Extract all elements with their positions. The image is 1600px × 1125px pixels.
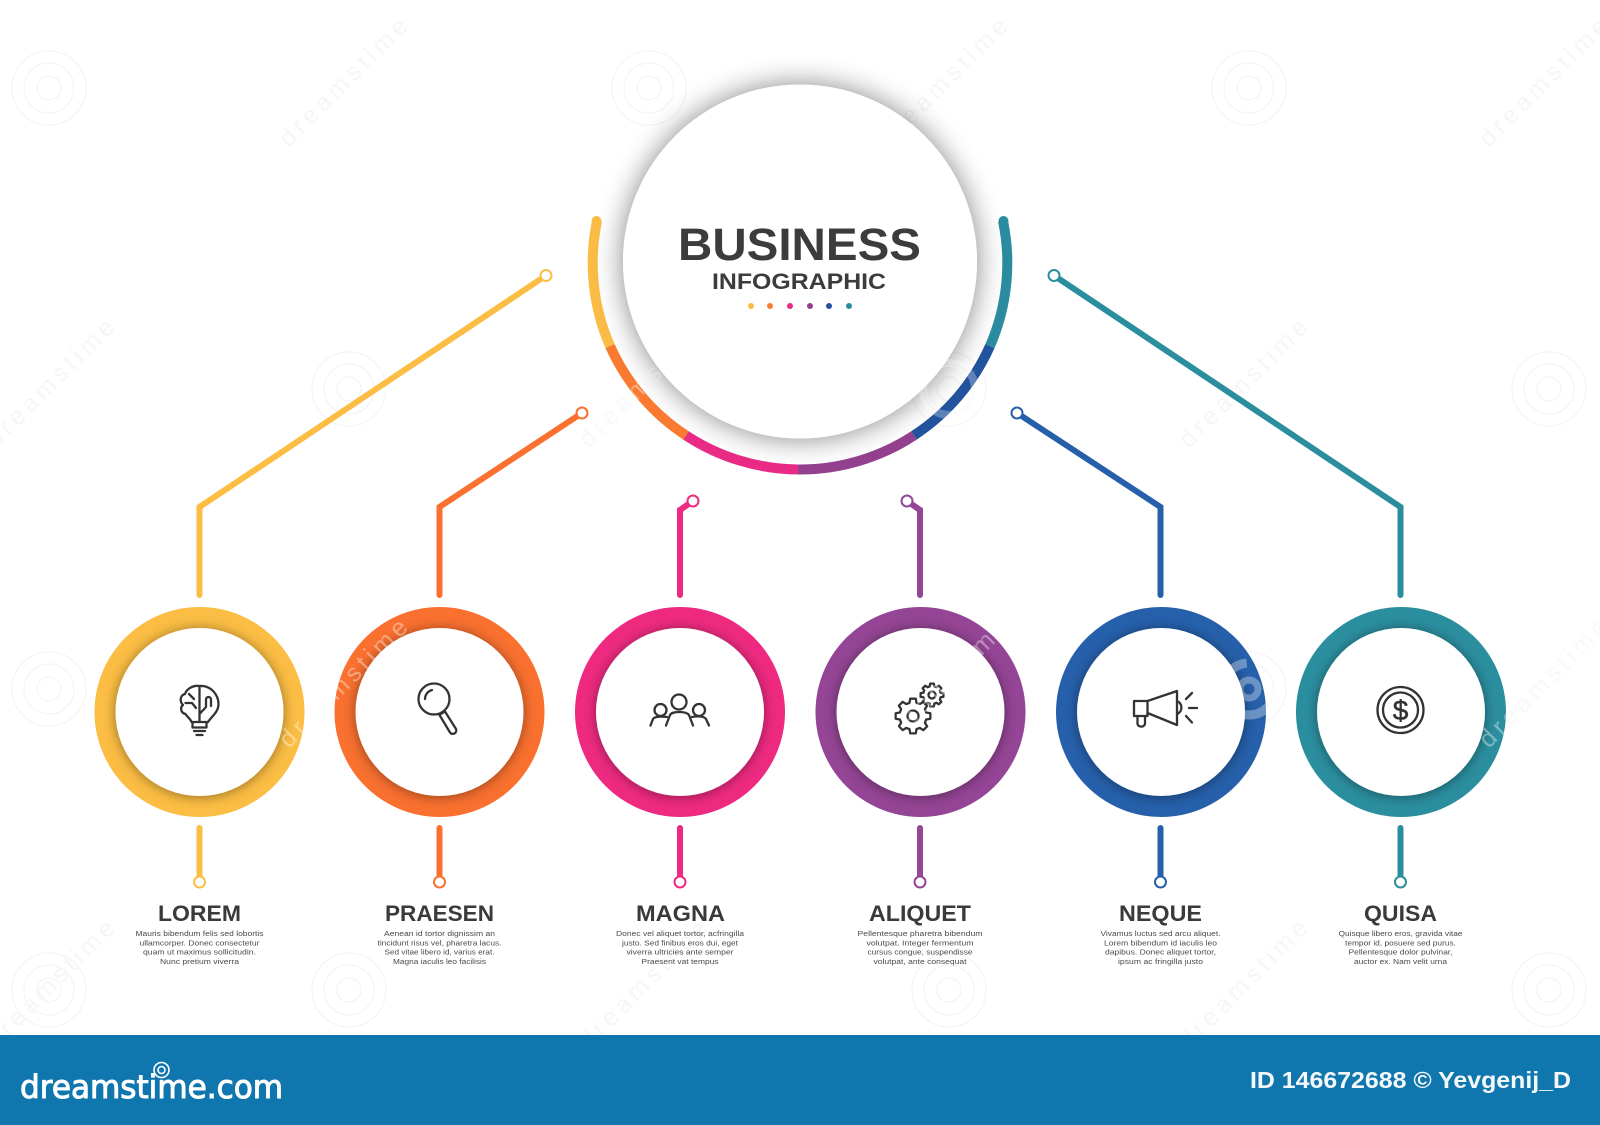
description: dapibus. Donec aliquet tortor, bbox=[1105, 948, 1216, 957]
icon: magnifier bbox=[418, 684, 456, 734]
description: Nunc pretium viverra bbox=[160, 957, 240, 966]
colour dots bbox=[748, 303, 852, 309]
subtitle: INFOGRAPHIC bbox=[712, 269, 886, 294]
description: Vivamus luctus sed arcu aliquet. bbox=[1100, 929, 1220, 938]
lower stem bbox=[194, 828, 205, 888]
panel: praesen bbox=[334, 408, 588, 966]
panel: lorem bbox=[94, 270, 552, 966]
description: Praesent vat tempus bbox=[642, 957, 719, 966]
connector bbox=[680, 496, 698, 595]
label: ALIQUET bbox=[869, 901, 972, 926]
description: Mauris bibendum felis sed lobortis bbox=[136, 929, 264, 938]
label: MAGNA bbox=[636, 901, 725, 926]
icon: megaphone bbox=[1134, 691, 1197, 727]
connector bbox=[440, 408, 588, 595]
description: Lorem bibendum id iaculis leo bbox=[1104, 938, 1217, 947]
panel: magna bbox=[575, 496, 785, 966]
icon: gears bbox=[896, 684, 943, 733]
description: Sed vitae libero id, varius erat. bbox=[384, 948, 494, 957]
watermark: light overlay on coloured shapes: dreamstime bbox=[573, 313, 713, 453]
icon: team bbox=[650, 694, 709, 726]
description bbox=[1338, 929, 1462, 966]
description: tempor id, posuere sed purus. bbox=[1345, 938, 1456, 947]
description: justo. Sed finibus eros dui, eget bbox=[621, 938, 739, 947]
description bbox=[616, 929, 745, 966]
icon: brain bulb bbox=[181, 686, 218, 735]
description: volutpat. Integer fermentum bbox=[866, 938, 974, 947]
title: BUSINESS bbox=[678, 219, 921, 270]
label: LOREM bbox=[158, 901, 241, 926]
ring bbox=[816, 607, 1026, 817]
connector bbox=[200, 270, 552, 595]
description: cursus congue, suspendisse bbox=[868, 948, 972, 957]
watermark: faint background pattern: dreamstime bbox=[873, 12, 1013, 152]
description bbox=[136, 929, 264, 966]
lower stem bbox=[674, 828, 686, 888]
connector bbox=[1048, 270, 1400, 595]
icon: dollar coin: $ bbox=[1393, 695, 1409, 726]
description: Aenean id tortor dignissim an bbox=[384, 929, 495, 938]
central segmented arc bbox=[592, 216, 1008, 470]
central circle with title bbox=[623, 84, 977, 438]
description: tincidunt risus vel, pharetra lacus. bbox=[378, 938, 502, 947]
lower stem bbox=[914, 828, 926, 888]
description: Donec vel aliquet tortor, acfringilla bbox=[616, 929, 745, 938]
description: volutpat, ante consequat bbox=[874, 957, 967, 966]
lower stem bbox=[1155, 828, 1166, 888]
footer logo: dreamstime.com bbox=[20, 1068, 283, 1106]
panel: aliquet bbox=[816, 496, 1026, 966]
lower stem bbox=[434, 828, 445, 888]
description: ullamcorper. Donec consectetur bbox=[140, 938, 260, 947]
watermark: faint background pattern: dreamstime bbox=[573, 914, 713, 1054]
footer bar bbox=[0, 1035, 1600, 1125]
description: Pellentesque dolor pulvinar, bbox=[1348, 948, 1452, 957]
description: quam ut maximus sollicitudin. bbox=[143, 948, 256, 957]
description bbox=[378, 929, 502, 966]
icon: dollar coin bbox=[1378, 687, 1424, 733]
connector bbox=[1012, 408, 1160, 595]
panel: neque bbox=[1012, 408, 1266, 966]
lower stem bbox=[1395, 828, 1406, 888]
ring bbox=[334, 607, 544, 817]
description: ipsum ac fringilla justo bbox=[1118, 957, 1203, 966]
watermark: light overlay on coloured shapes: dreamstime bbox=[873, 613, 1013, 753]
description: Pellentesque pharetra bibendum bbox=[858, 929, 982, 938]
label: PRAESEN bbox=[385, 901, 494, 926]
description: Quisque libero eros, gravida vitae bbox=[1338, 929, 1462, 938]
description bbox=[1100, 929, 1220, 966]
watermark: faint background pattern: dreamstime bbox=[1173, 313, 1313, 453]
description: Magna iaculis leo facilisis bbox=[393, 957, 486, 966]
panel: quisa bbox=[1048, 270, 1506, 966]
watermark: faint background pattern: dreamstime bbox=[573, 313, 713, 453]
description: viverra ultricies ante semper bbox=[626, 948, 734, 957]
watermark: faint background pattern: dreamstime bbox=[1173, 914, 1313, 1054]
ring bbox=[94, 607, 304, 817]
watermark: faint background pattern: dreamstime bbox=[273, 12, 413, 152]
icon: logo spiral bbox=[154, 1062, 169, 1078]
ring bbox=[575, 607, 785, 817]
label: NEQUE bbox=[1119, 901, 1202, 926]
description: auctor ex. Nam velit urna bbox=[1354, 957, 1448, 966]
description bbox=[858, 929, 982, 966]
watermark: light overlay on coloured shapes: dreamstime bbox=[273, 613, 413, 753]
watermark: light overlay on coloured shapes bbox=[273, 313, 1600, 753]
footer image id: ID 146672688 © Yevgenij_D bbox=[1250, 1067, 1571, 1093]
ring bbox=[1296, 607, 1506, 817]
ring bbox=[1056, 607, 1266, 817]
label: QUISA bbox=[1364, 901, 1437, 926]
connector bbox=[902, 496, 920, 595]
